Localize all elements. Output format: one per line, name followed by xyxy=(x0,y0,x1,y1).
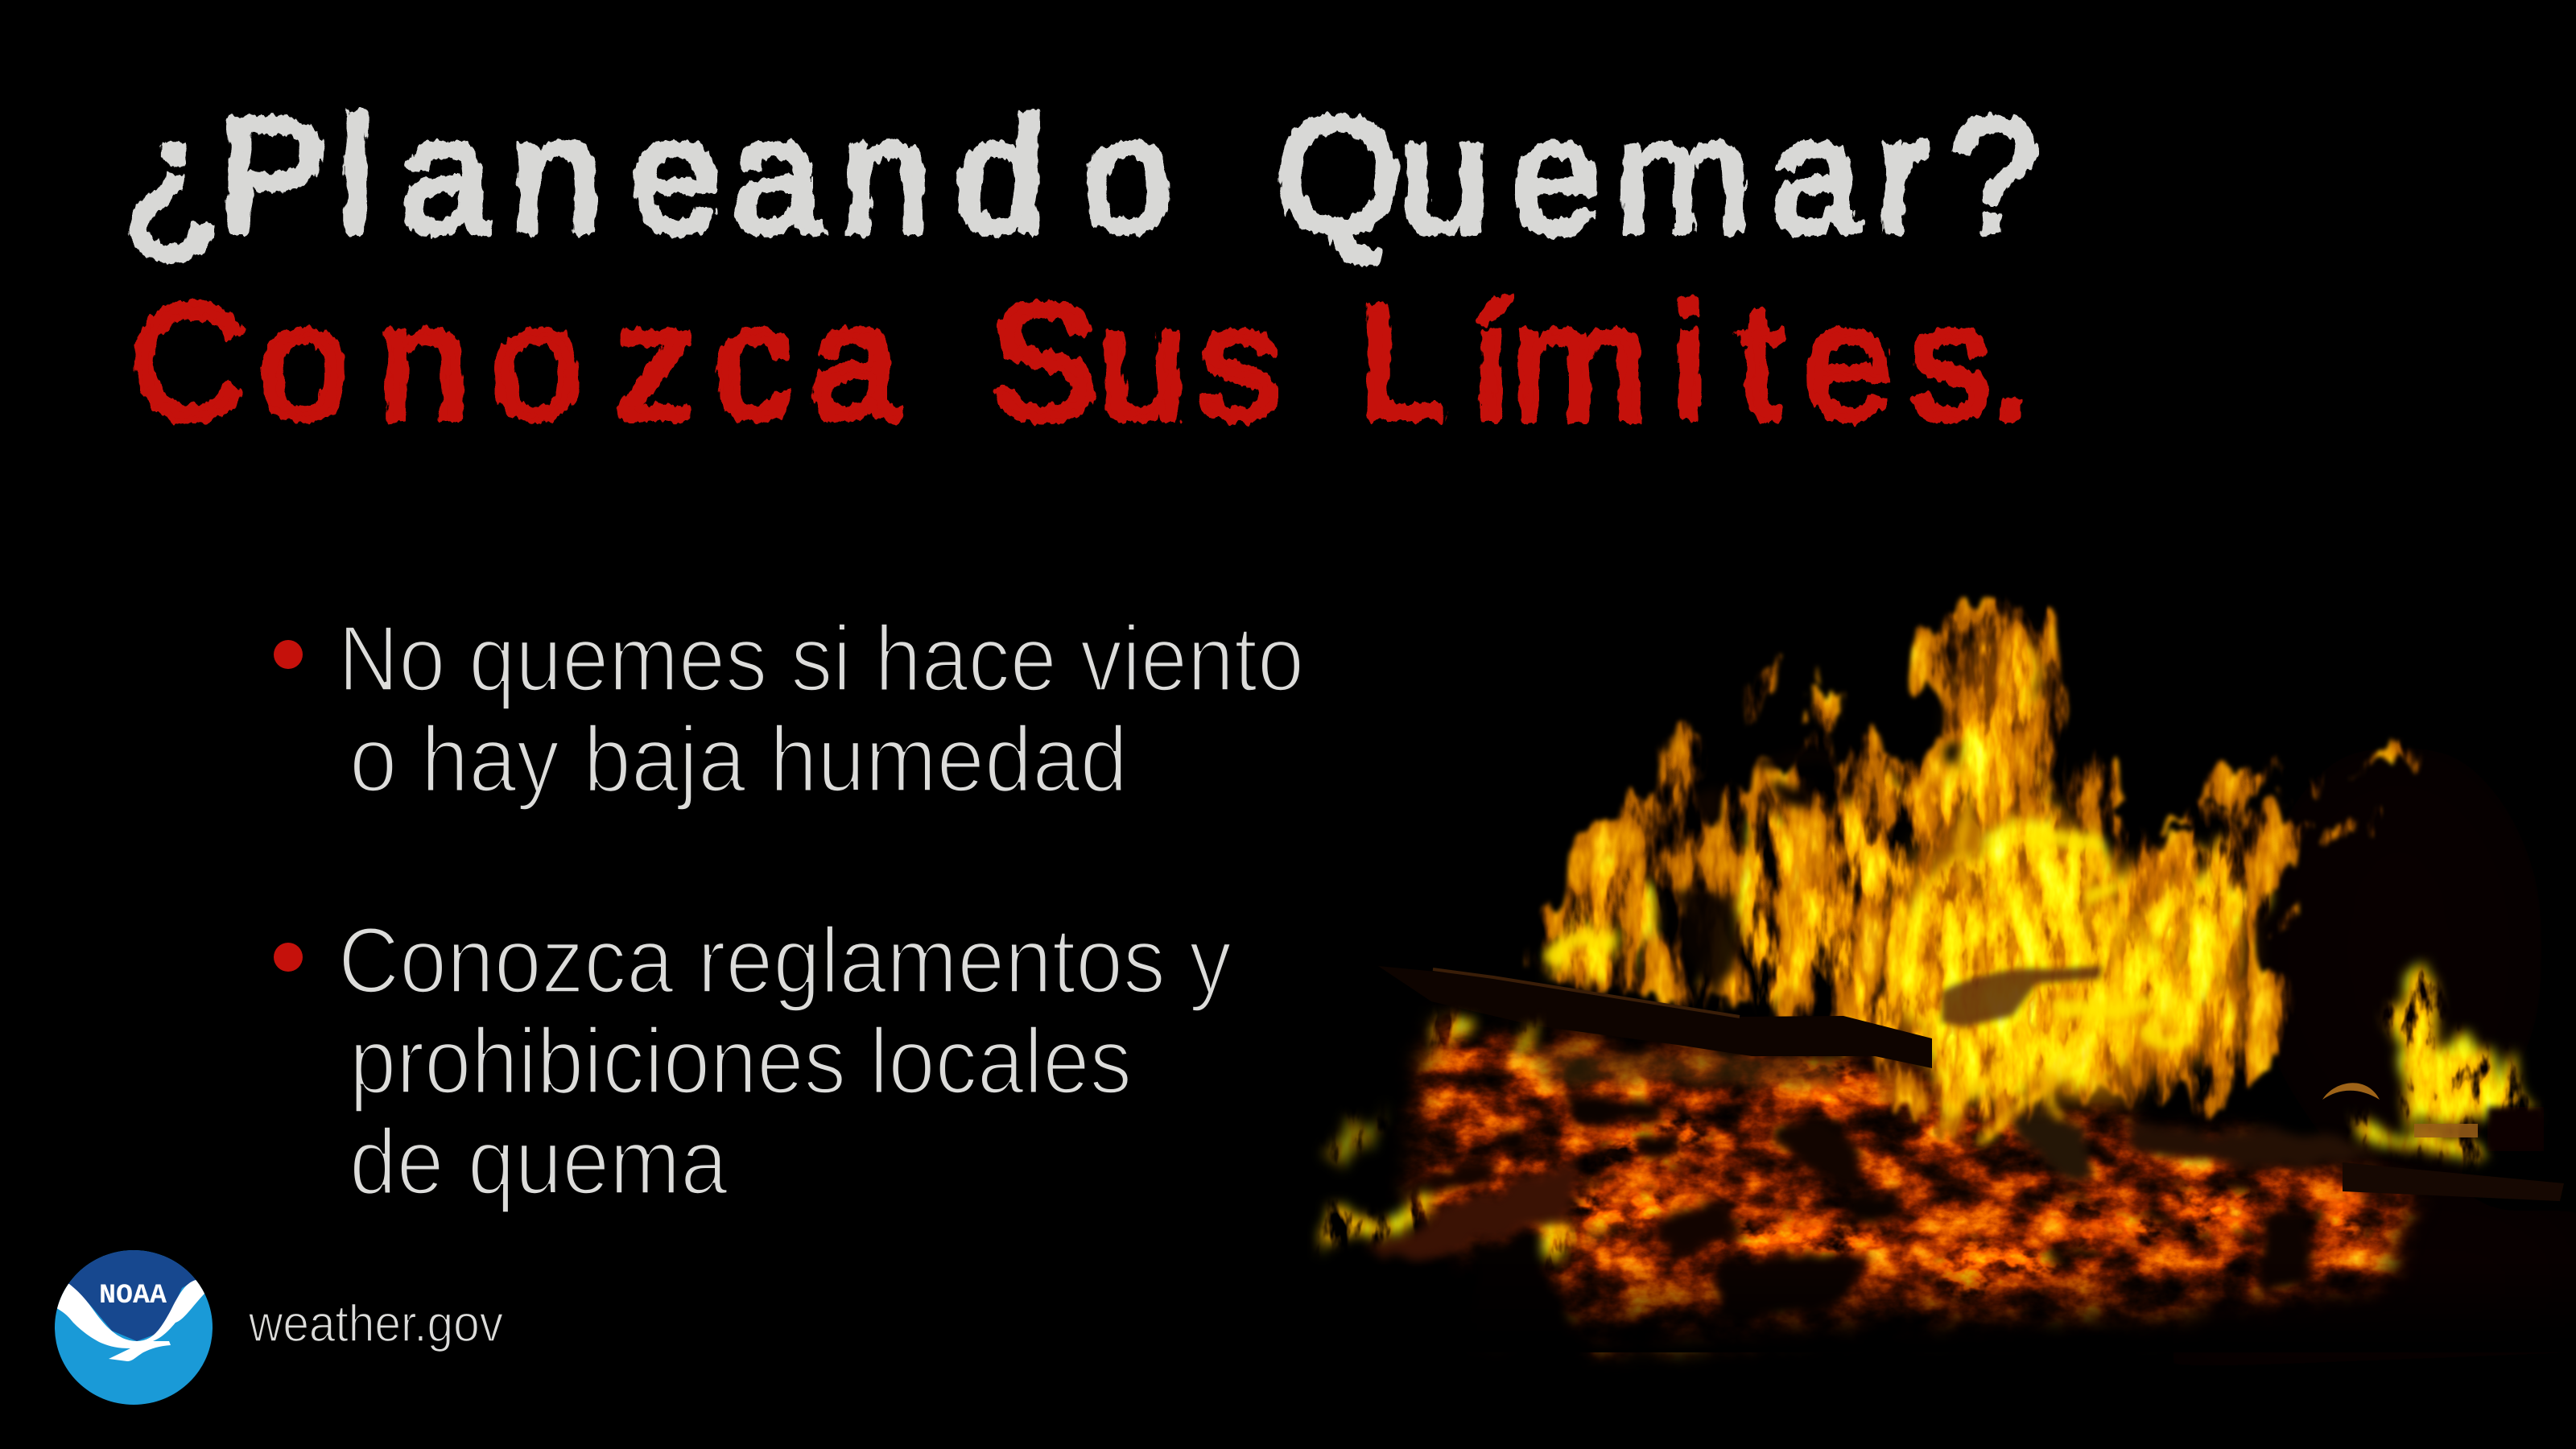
wooden plank across the fire xyxy=(1378,966,2103,1068)
glowing embers xyxy=(1578,1063,2375,1300)
background glow xyxy=(1433,741,2576,1368)
soft fade at the base of the fire xyxy=(1368,1264,2576,1352)
ember mound xyxy=(1417,1018,2415,1340)
bullet 2 text: Conozca reglamentos y xyxy=(338,908,1232,1013)
charred logs and chunks xyxy=(1368,1095,2383,1352)
bullet 1 marker xyxy=(274,640,303,669)
bullet list xyxy=(274,606,1304,1214)
bullet 2 text: de quema xyxy=(349,1109,728,1214)
bright flame strands xyxy=(1554,773,2190,1143)
bullet 1 text: No quemes si hace viento xyxy=(338,606,1304,711)
flames hot core xyxy=(1550,813,2238,1095)
fire photo xyxy=(1320,602,2576,1368)
NOAA wordmark: NOAA xyxy=(99,1281,167,1311)
bullet 2 marker xyxy=(274,943,303,972)
bullet 1 text xyxy=(338,606,1304,811)
website: weather.gov: weather.gov xyxy=(248,1294,503,1352)
flames middle layer xyxy=(1558,628,2278,1119)
right side flame xyxy=(2322,968,2564,1201)
title line 2: Conozca Sus Límites.: Conozca Sus Límites. xyxy=(129,270,2034,454)
left side flames xyxy=(1320,1016,1616,1264)
amber underglow of the flames xyxy=(1884,636,2246,1103)
olive haze over the embers xyxy=(1530,1046,1843,1087)
dark gaps between flames xyxy=(1652,725,1964,998)
flames outer silhouette xyxy=(1522,602,2421,1144)
bullet 2 text xyxy=(338,908,1232,1214)
title line 1: ¿Planeando Quemar?: ¿Planeando Quemar? xyxy=(122,84,2039,267)
NOAA logo xyxy=(55,1250,213,1405)
bullet 1 text: o hay baja humedad xyxy=(349,707,1128,811)
bullet 2 text: prohibiciones locales xyxy=(349,1009,1132,1113)
